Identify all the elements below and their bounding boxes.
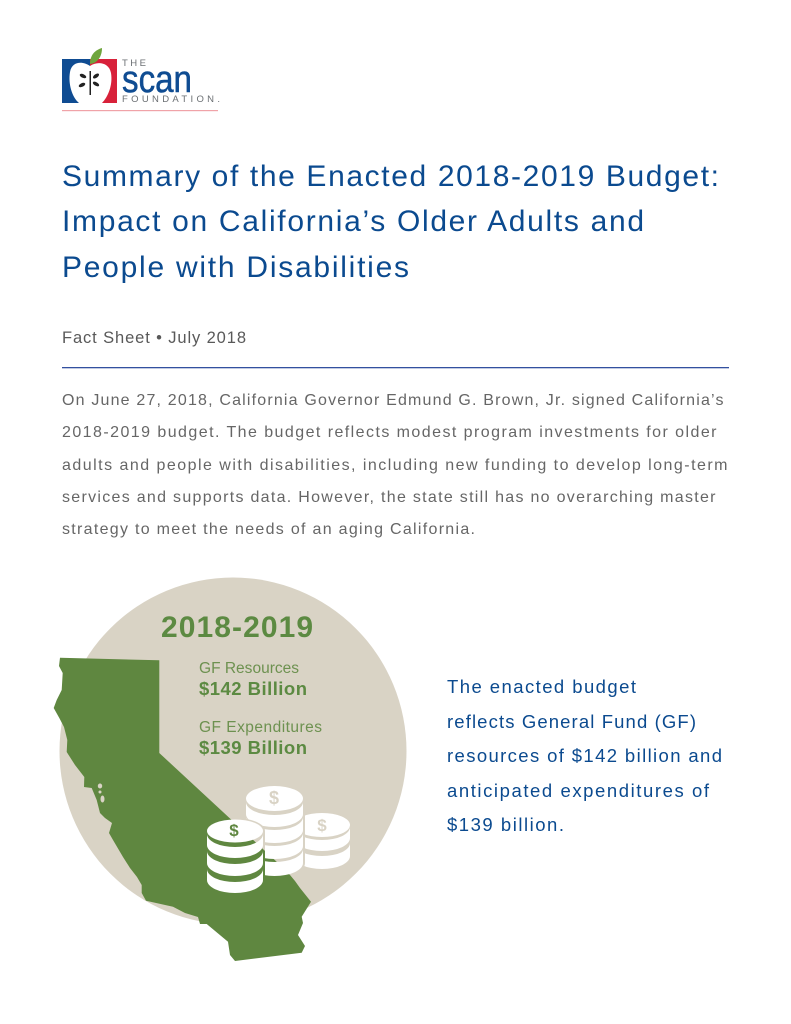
logo wordmark: FOUNDATION. <box>122 94 220 105</box>
intro paragraph: services and supports data. However, the state still has no overarching master <box>62 489 716 506</box>
GF expenditures: GF Expenditures <box>199 719 322 736</box>
GF resources: GF Resources <box>199 660 299 677</box>
GF resources <box>199 660 307 699</box>
title <box>62 160 719 284</box>
intro paragraph: strategy to meet the needs of an aging California. <box>62 521 475 538</box>
callout text: reflects General Fund (GF) <box>447 711 696 732</box>
logo wordmark: THE <box>122 58 146 69</box>
background circle <box>60 578 406 924</box>
year heading: 2018-2019 <box>161 611 313 644</box>
callout text: The enacted budget <box>447 676 636 697</box>
intro paragraph <box>62 392 728 538</box>
title: People with Disabilities <box>62 251 409 284</box>
intro paragraph: 2018-2019 budget. The budget reflects modest program investments for older <box>62 424 717 441</box>
callout text: $139 billion. <box>447 814 564 835</box>
GF expenditures <box>199 719 322 758</box>
bay islands <box>98 784 104 802</box>
title: Impact on California’s Older Adults and <box>62 205 644 238</box>
logo: The SCAN Foundation <box>62 48 220 111</box>
GF resources: $142 Billion <box>199 678 307 699</box>
icon: right coin stack: $ <box>317 816 327 835</box>
GF expenditures: $139 Billion <box>199 737 307 758</box>
icon: back coin stack: $ <box>269 788 279 808</box>
intro paragraph: On June 27, 2018, California Governor Edmund G. Brown, Jr. signed California’s <box>62 392 724 409</box>
icon: back coin stack <box>246 786 303 876</box>
title: Summary of the Enacted 2018-2019 Budget: <box>62 160 719 193</box>
subheading: fact sheet date: Fact Sheet • July 2018 <box>62 329 246 347</box>
intro paragraph: adults and people with disabilities, including new funding to develop long-term <box>62 457 728 474</box>
logo wordmark: scan <box>122 59 192 101</box>
icon: right coin stack <box>304 813 350 869</box>
icon: front coin stack: $ <box>229 821 239 840</box>
icon: front coin stack <box>207 820 263 893</box>
callout text <box>447 676 722 835</box>
icon: apple logo mark <box>62 48 117 103</box>
callout text: anticipated expenditures of <box>447 780 710 801</box>
budget graphic <box>54 578 406 961</box>
map of California <box>54 658 311 961</box>
callout text: resources of $142 billion and <box>447 745 722 766</box>
